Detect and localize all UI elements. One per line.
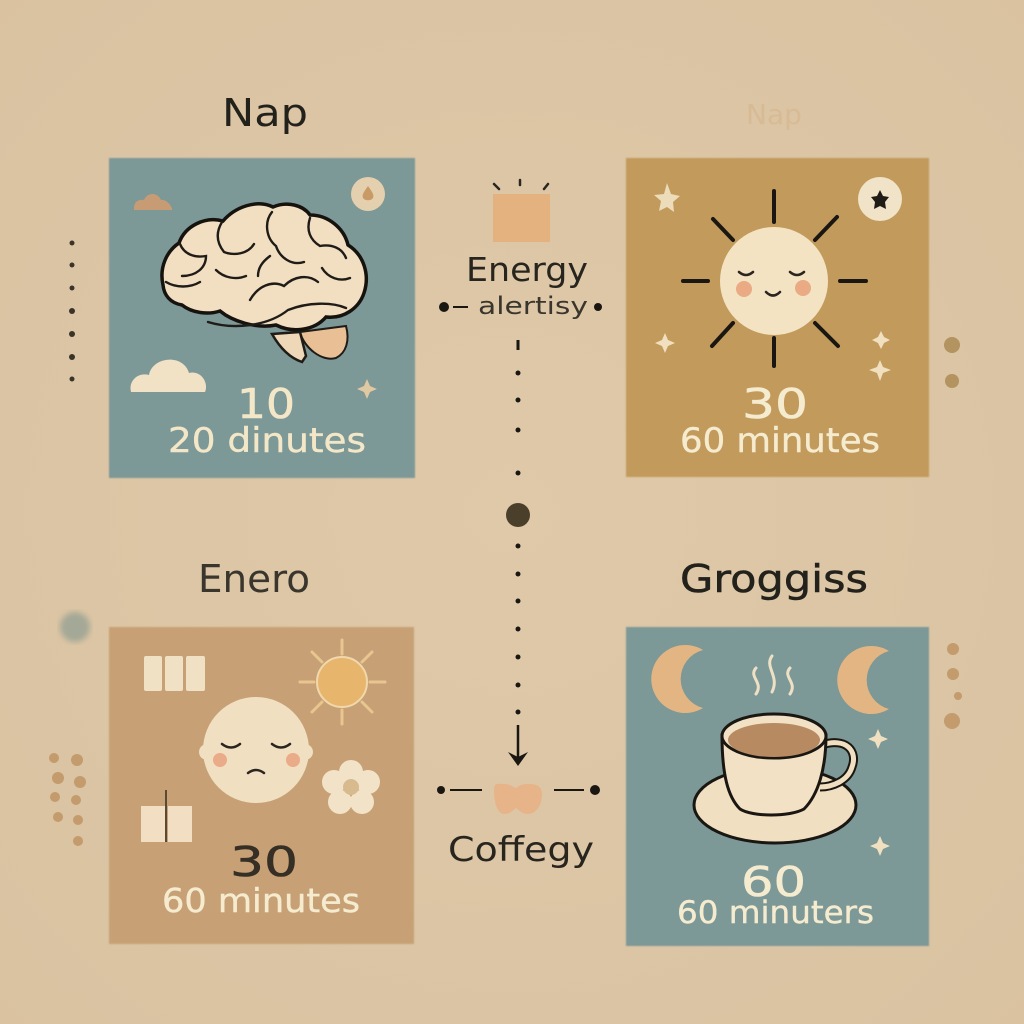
icon: small cloud — [134, 194, 172, 210]
icon: sun — [683, 191, 866, 366]
connector: coffee — [437, 784, 600, 814]
icon: coffee blob — [494, 784, 542, 814]
duration: 20 dinutes — [168, 421, 366, 461]
icon: energy square — [493, 180, 550, 242]
label: energy — [439, 180, 602, 320]
number: 60 — [741, 858, 806, 906]
icon: sleepy face — [199, 697, 313, 803]
text: energy: Energy — [466, 250, 588, 289]
heading: Nap: Nap — [222, 91, 308, 135]
panel: sun — [626, 158, 929, 477]
icon: star — [654, 183, 680, 212]
dots: left of top panel — [69, 240, 75, 382]
panel: sleepy face — [109, 627, 414, 944]
faint heading: Nap: Nap — [746, 98, 802, 131]
dots: right of top panel — [944, 337, 960, 388]
icon: steam — [754, 656, 792, 694]
icon: sparkles — [868, 729, 890, 856]
icon: cloud — [130, 360, 206, 392]
number: 30 — [230, 838, 298, 886]
dots: right of bottom panel — [944, 643, 962, 729]
duration: 60 minuters — [677, 895, 874, 931]
icon: drop badge — [351, 177, 385, 211]
icon: sparkle — [357, 379, 377, 399]
icon: small sun — [300, 640, 385, 724]
duration: 60 minutes — [680, 421, 880, 461]
connector: alertisy — [439, 292, 602, 320]
dots: left of bottom panel — [49, 753, 86, 846]
panel: coffee — [626, 627, 929, 946]
heading: Groggiss: Groggiss — [680, 557, 868, 601]
connector: alertisy: alertisy — [478, 292, 588, 320]
number: 10 — [237, 380, 295, 428]
icon: flower — [322, 760, 380, 814]
icon: book lower — [141, 790, 192, 842]
icon: book — [144, 656, 205, 691]
decorative circle left — [60, 612, 90, 642]
panel: brain nap — [109, 158, 415, 478]
heading: Enero: Enero — [198, 557, 310, 601]
timeline: vertical dotted arrow — [506, 340, 530, 766]
number: 30 — [742, 380, 808, 428]
text: Coffegy: Coffegy — [448, 830, 594, 870]
icon: coffee cup — [694, 714, 856, 843]
icon: star badge — [858, 177, 902, 221]
icon: sparkles — [655, 331, 891, 381]
icon: brain — [162, 204, 366, 362]
duration: 60 minutes — [162, 881, 360, 920]
icon: moons — [651, 645, 889, 714]
